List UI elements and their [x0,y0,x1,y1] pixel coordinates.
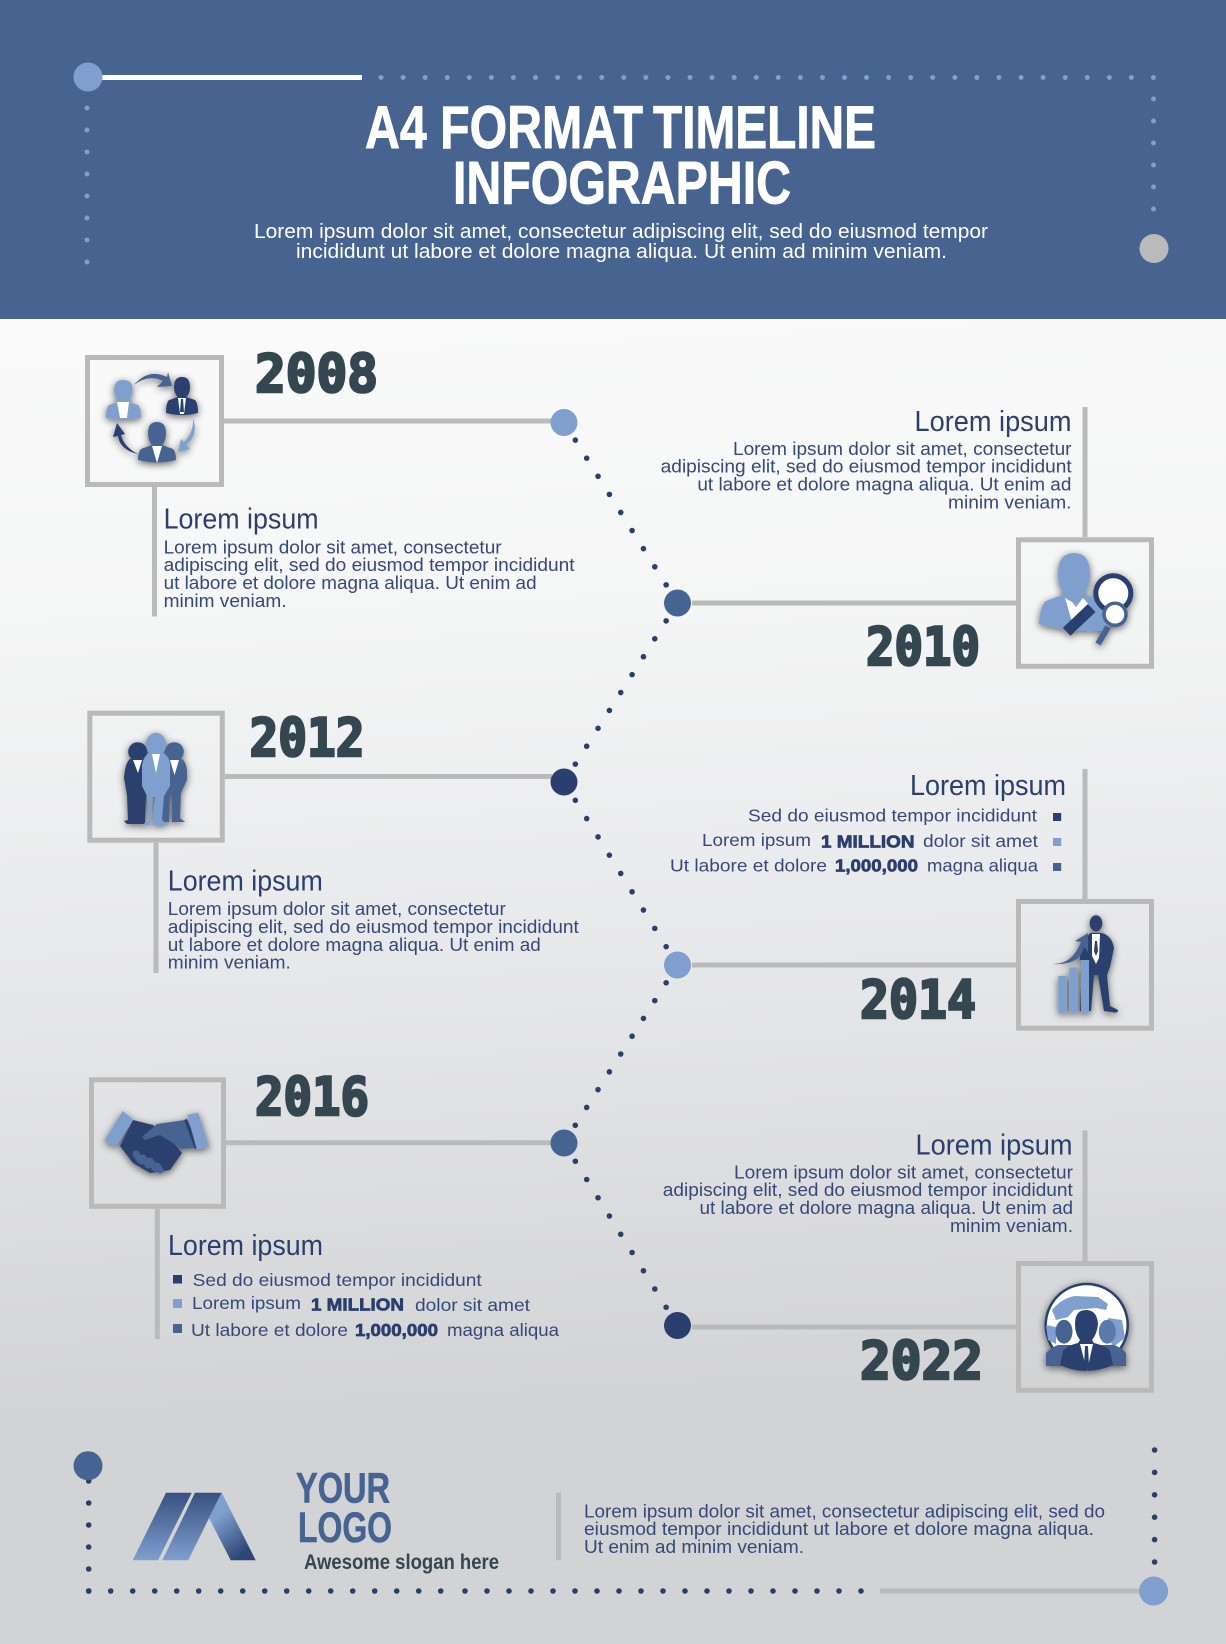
subtitle: Lorem ipsum dolor sit amet, consectetur adipiscing elit, sed do eiusmod tempor [254,221,988,243]
text block 2016: 1,000,000 [355,1320,438,1340]
bullet [173,1275,182,1284]
text block 2022 [663,1130,1073,1236]
bullet [1053,863,1061,871]
text block 2014: dolor sit amet [923,831,1038,851]
footer text [584,1500,1105,1557]
title: TIMELINE [653,94,876,161]
text block 2010: minim veniam. [948,491,1072,512]
text block 2010 [661,406,1072,512]
title: INFOGRAPHIC [453,150,791,216]
text block 2016: Sed do eiusmod tempor incididunt [193,1270,482,1290]
icon frame 2016 [92,1080,224,1206]
text block 2016: 1 MILLION [311,1295,404,1315]
footer text: Lorem ipsum dolor sit amet, consectetur adipiscing elit, sed do [584,1500,1105,1522]
text block 2014: Ut labore et dolore [670,856,827,876]
icon: person with magnifiers [1039,553,1131,644]
icon: businessman with bar chart [1052,915,1118,1013]
text block 2014: 1,000,000 [835,856,918,876]
bullet [173,1324,182,1333]
text block 2008: Lorem ipsum dolor sit amet, consectetur [164,536,502,557]
node 2016 [550,1130,578,1156]
icon frame 2022 [1018,1264,1152,1390]
year 2010: 2010 [866,617,980,678]
bullet [173,1299,182,1308]
text block 2016 [168,1230,559,1340]
text block 2008 [164,504,575,611]
text block 2022: adipiscing elit, sed do eiusmod tempor incididunt [663,1179,1073,1200]
year 2012: 2012 [250,708,364,769]
logo text [296,1465,392,1552]
title [365,94,876,216]
icon frame 2010 [1018,540,1152,666]
text block 2014: 1 MILLION [821,832,914,852]
bullet [1053,838,1061,846]
subtitle: incididunt ut labore et dolore magna aliqua. Ut enim ad minim veniam. [296,241,947,263]
subtitle [254,221,988,263]
text block 2010: ut labore et dolore magna aliqua. Ut enim ad [697,474,1071,494]
text block 2014: Lorem ipsum [910,770,1066,802]
text block 2022: ut labore et dolore magna aliqua. Ut enim ad [700,1197,1073,1218]
footer text: Ut enim ad minim veniam. [584,1536,804,1557]
milestone 2016 [92,1067,578,1340]
connector 2010 [692,407,1085,603]
milestone 2012 [90,708,579,973]
text block 2012: adipiscing elit, sed do eiusmod tempor incididunt [168,916,579,937]
connector 2016 [157,1143,552,1339]
connector 2008 [154,421,552,616]
milestone 2022 [663,1130,1152,1392]
icon frame 2008 [88,358,222,484]
text block 2008: minim veniam. [164,590,287,611]
node 2014 [664,952,691,978]
text block 2012: ut labore et dolore magna aliqua. Ut enim ad [168,934,541,955]
logo text: YOUR [296,1465,390,1513]
text block 2014: Sed do eiusmod tempor incididunt [748,806,1037,826]
text block 2016: Lorem ipsum [168,1230,323,1262]
footer frame decoration [74,1450,1168,1606]
text block 2008: adipiscing elit, sed do eiusmod tempor incididunt [164,554,575,575]
node 2022 [664,1312,691,1339]
text block 2016: Lorem ipsum [192,1293,301,1313]
milestone 2008 [88,344,578,616]
connector 2022 [692,1130,1085,1327]
text block 2014: magna aliqua [927,856,1038,876]
year 2014: 2014 [860,970,976,1031]
year 2016: 2016 [255,1067,369,1128]
text block 2008: Lorem ipsum [164,504,319,536]
footer text: eiusmod tempor incididunt ut labore et dolore magna aliqua. [584,1518,1094,1539]
text block 2014 [670,770,1066,876]
icon: handshake [104,1111,209,1173]
slogan: Awesome slogan here [304,1550,499,1574]
title: A4 FORMAT [365,94,643,161]
text block 2012 [168,865,579,973]
text block 2022: Lorem ipsum [916,1130,1072,1162]
milestone 2010 [661,406,1152,678]
text block 2016: magna aliqua [447,1320,559,1340]
connector 2012 [156,776,552,973]
icon frame 2014 [1018,902,1152,1028]
milestone 2014 [664,769,1152,1031]
connector 2014 [692,769,1085,965]
header band [0,0,1226,319]
logo text: LOGO [298,1504,392,1552]
icon: three people in a cycle [106,372,198,463]
year 2022: 2022 [860,1331,983,1392]
dotted timeline path [564,422,678,1326]
node 2010 [664,590,691,616]
text block 2012: Lorem ipsum [168,865,323,897]
text block 2014: Lorem ipsum [702,830,811,850]
text block 2016: Ut labore et dolore [191,1320,348,1340]
text block 2010: Lorem ipsum dolor sit amet, consectetur [733,438,1072,459]
text block 2012: Lorem ipsum dolor sit amet, consectetur [168,898,506,919]
text block 2022: Lorem ipsum dolor sit amet, consectetur [734,1161,1073,1182]
text block 2010: adipiscing elit, sed do eiusmod tempor incididunt [661,456,1072,477]
node 2008 [550,409,578,436]
text block 2008: ut labore et dolore magna aliqua. Ut enim ad [164,572,537,593]
icon: team on globe [1046,1284,1128,1371]
bullet [1053,813,1061,821]
text block 2010: Lorem ipsum [914,406,1072,438]
icon: three business people [124,733,187,825]
text block 2022: minim veniam. [950,1215,1073,1236]
footer divider [556,1493,561,1560]
text block 2012: minim veniam. [168,952,291,973]
logo mark [133,1493,256,1560]
year 2008: 2008 [255,344,378,405]
icon frame 2012 [90,713,222,840]
text block 2016: dolor sit amet [415,1295,530,1315]
node 2012 [550,768,578,796]
